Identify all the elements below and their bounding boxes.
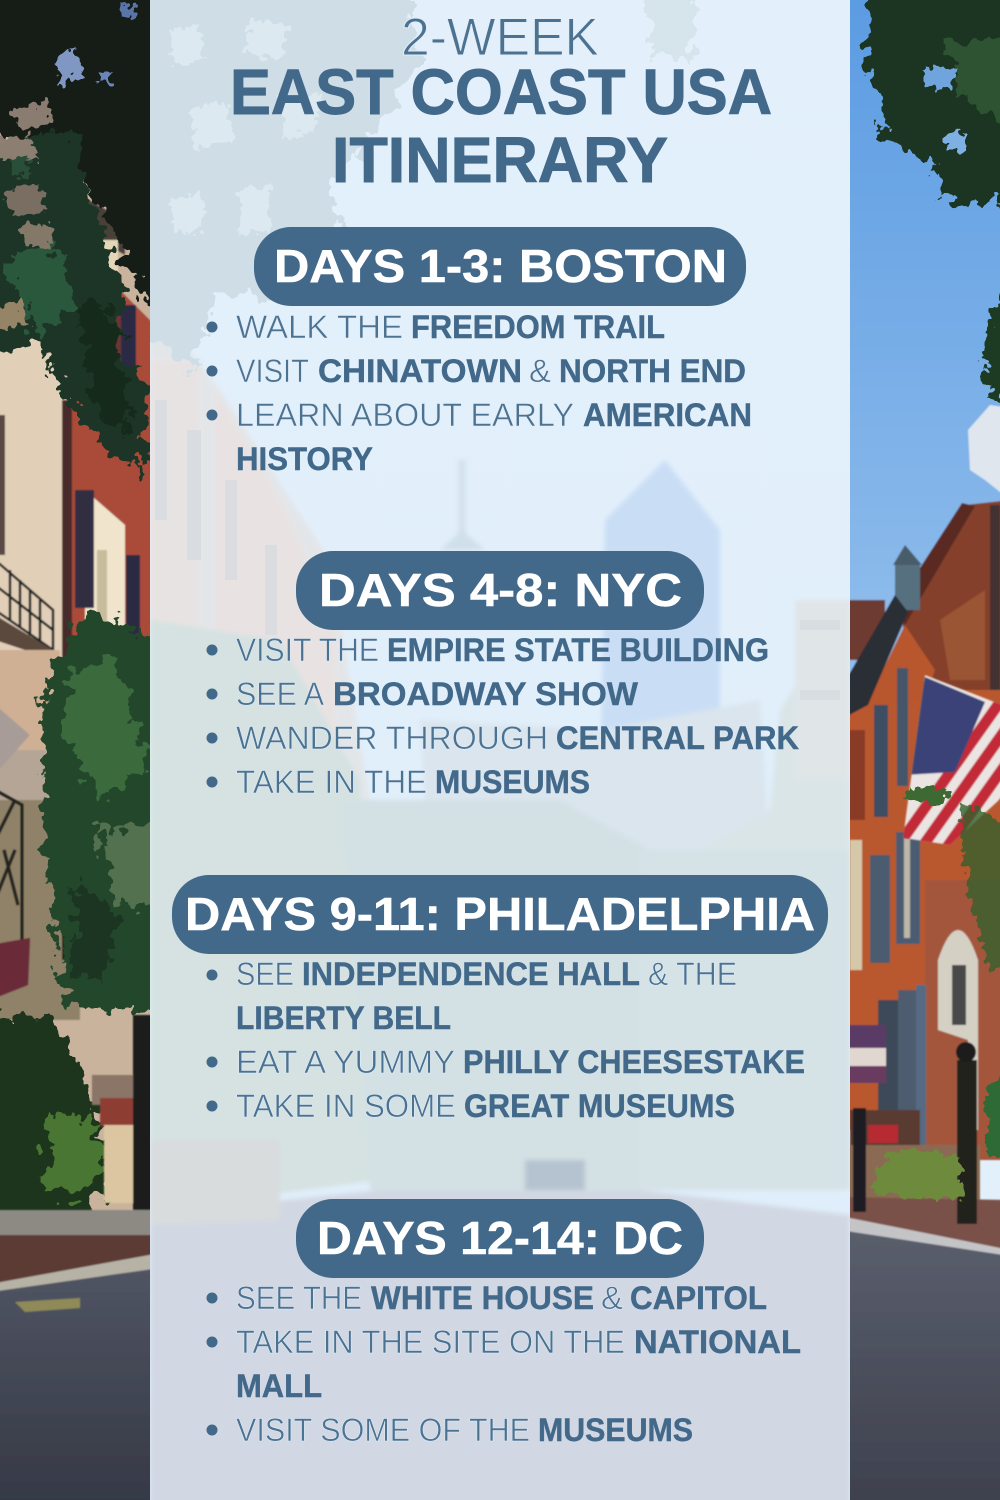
- list: Boston activities: HISTORY: [236, 441, 373, 477]
- american flag: [895, 675, 1000, 850]
- list: NYC activities: [206, 632, 799, 800]
- left street photo strip: [0, 0, 160, 1310]
- list: NYC activities: EMPIRE STATE BUILDING: [387, 632, 769, 668]
- list: Boston activities: LEARN ABOUT EARLY: [236, 397, 574, 433]
- day badge: Boston: [254, 227, 746, 306]
- day badge: Philadelphia: [172, 875, 828, 954]
- title: [230, 8, 772, 196]
- pavement: [840, 1197, 1000, 1252]
- list: DC activities: MALL: [236, 1368, 322, 1404]
- list: DC activities: &: [601, 1280, 623, 1316]
- sign: [840, 1025, 886, 1048]
- list: NYC activities: VISIT THE: [236, 632, 379, 668]
- centre translucent panel with faded photo: [100, 0, 850, 1500]
- list: DC activities: SEE THE: [236, 1280, 362, 1316]
- list: Boston activities: CHINATOWN: [318, 353, 522, 389]
- list: DC activities: CAPITOL: [630, 1280, 767, 1316]
- faded tree: [100, 0, 700, 370]
- section: DC: [206, 1199, 801, 1448]
- faded right buildings: [765, 691, 850, 850]
- list: DC activities: WHITE HOUSE: [371, 1280, 594, 1316]
- right street photo strip: [840, 0, 1000, 1500]
- list: NYC activities: WANDER THROUGH: [236, 720, 548, 756]
- list: NYC activities: SEE A: [236, 676, 325, 712]
- cornice: [968, 405, 1000, 500]
- list: DC activities: MUSEUMS: [538, 1412, 693, 1448]
- section: NYC: [206, 551, 799, 800]
- list: Boston activities: [206, 309, 752, 477]
- section: Boston: [206, 227, 752, 477]
- list: Boston activities: AMERICAN: [583, 397, 752, 433]
- day badge: NYC: DAYS 4-8: NYC: [319, 564, 682, 616]
- buildings: [840, 600, 885, 660]
- faded road: [150, 1190, 850, 1500]
- faded left buildings: [150, 341, 370, 800]
- list: Philadelphia activities: GREAT MUSEUMS: [464, 1088, 735, 1124]
- left tree foliage: [0, 0, 230, 1220]
- right foliage: [868, 0, 1000, 408]
- faded tower and distance: [600, 460, 720, 800]
- list: Boston activities: FREEDOM TRAIL: [411, 309, 665, 345]
- list: DC activities: NATIONAL: [634, 1324, 801, 1360]
- list: Philadelphia activities: EAT A YUMMY: [236, 1044, 455, 1080]
- left pavement and road: [0, 790, 160, 1500]
- list: NYC activities: TAKE IN THE: [236, 764, 427, 800]
- list: Philadelphia activities: LIBERTY BELL: [236, 1000, 451, 1036]
- list: Philadelphia activities: PHILLY CHEESESTAKE: [463, 1044, 805, 1080]
- list: NYC activities: BROADWAY SHOW: [333, 676, 639, 712]
- title line: Itinerary: ITINERARY: [332, 124, 668, 196]
- list: DC activities: VISIT SOME OF THE: [236, 1412, 530, 1448]
- lower tree: [42, 610, 200, 1015]
- day badge: Philadelphia: DAYS 9-11: PHILADELPHIA: [185, 888, 815, 940]
- title line: East Coast USA: EAST COAST USA: [230, 56, 772, 128]
- day badge: DC: DAYS 12-14: DC: [317, 1212, 683, 1264]
- faded windows: [155, 400, 277, 635]
- list: Boston activities: &: [529, 353, 551, 389]
- list: Boston activities: WALK THE: [236, 309, 403, 345]
- list: NYC activities: CENTRAL PARK: [556, 720, 799, 756]
- list: Philadelphia activities: INDEPENDENCE HALL: [302, 956, 640, 992]
- list: Philadelphia activities: SEE: [236, 956, 294, 992]
- day badge: NYC: [296, 551, 704, 630]
- list: Philadelphia activities: & THE: [648, 956, 737, 992]
- section: Philadelphia: [172, 875, 828, 1124]
- list: Boston activities: NORTH END: [559, 353, 746, 389]
- day badge: Boston: DAYS 1-3: BOSTON: [274, 240, 727, 292]
- list: NYC activities: MUSEUMS: [435, 764, 590, 800]
- list: DC activities: [206, 1280, 801, 1448]
- hedge: [0, 1015, 115, 1220]
- bollards: [853, 1108, 866, 1212]
- list: Boston activities: VISIT: [236, 353, 309, 389]
- day badge: DC: [296, 1199, 704, 1278]
- list: Philadelphia activities: TAKE IN SOME: [236, 1088, 456, 1124]
- list: DC activities: TAKE IN THE SITE ON THE: [236, 1324, 625, 1360]
- list: Philadelphia activities: [206, 956, 805, 1124]
- title line: 2-week: 2-WEEK: [401, 8, 599, 67]
